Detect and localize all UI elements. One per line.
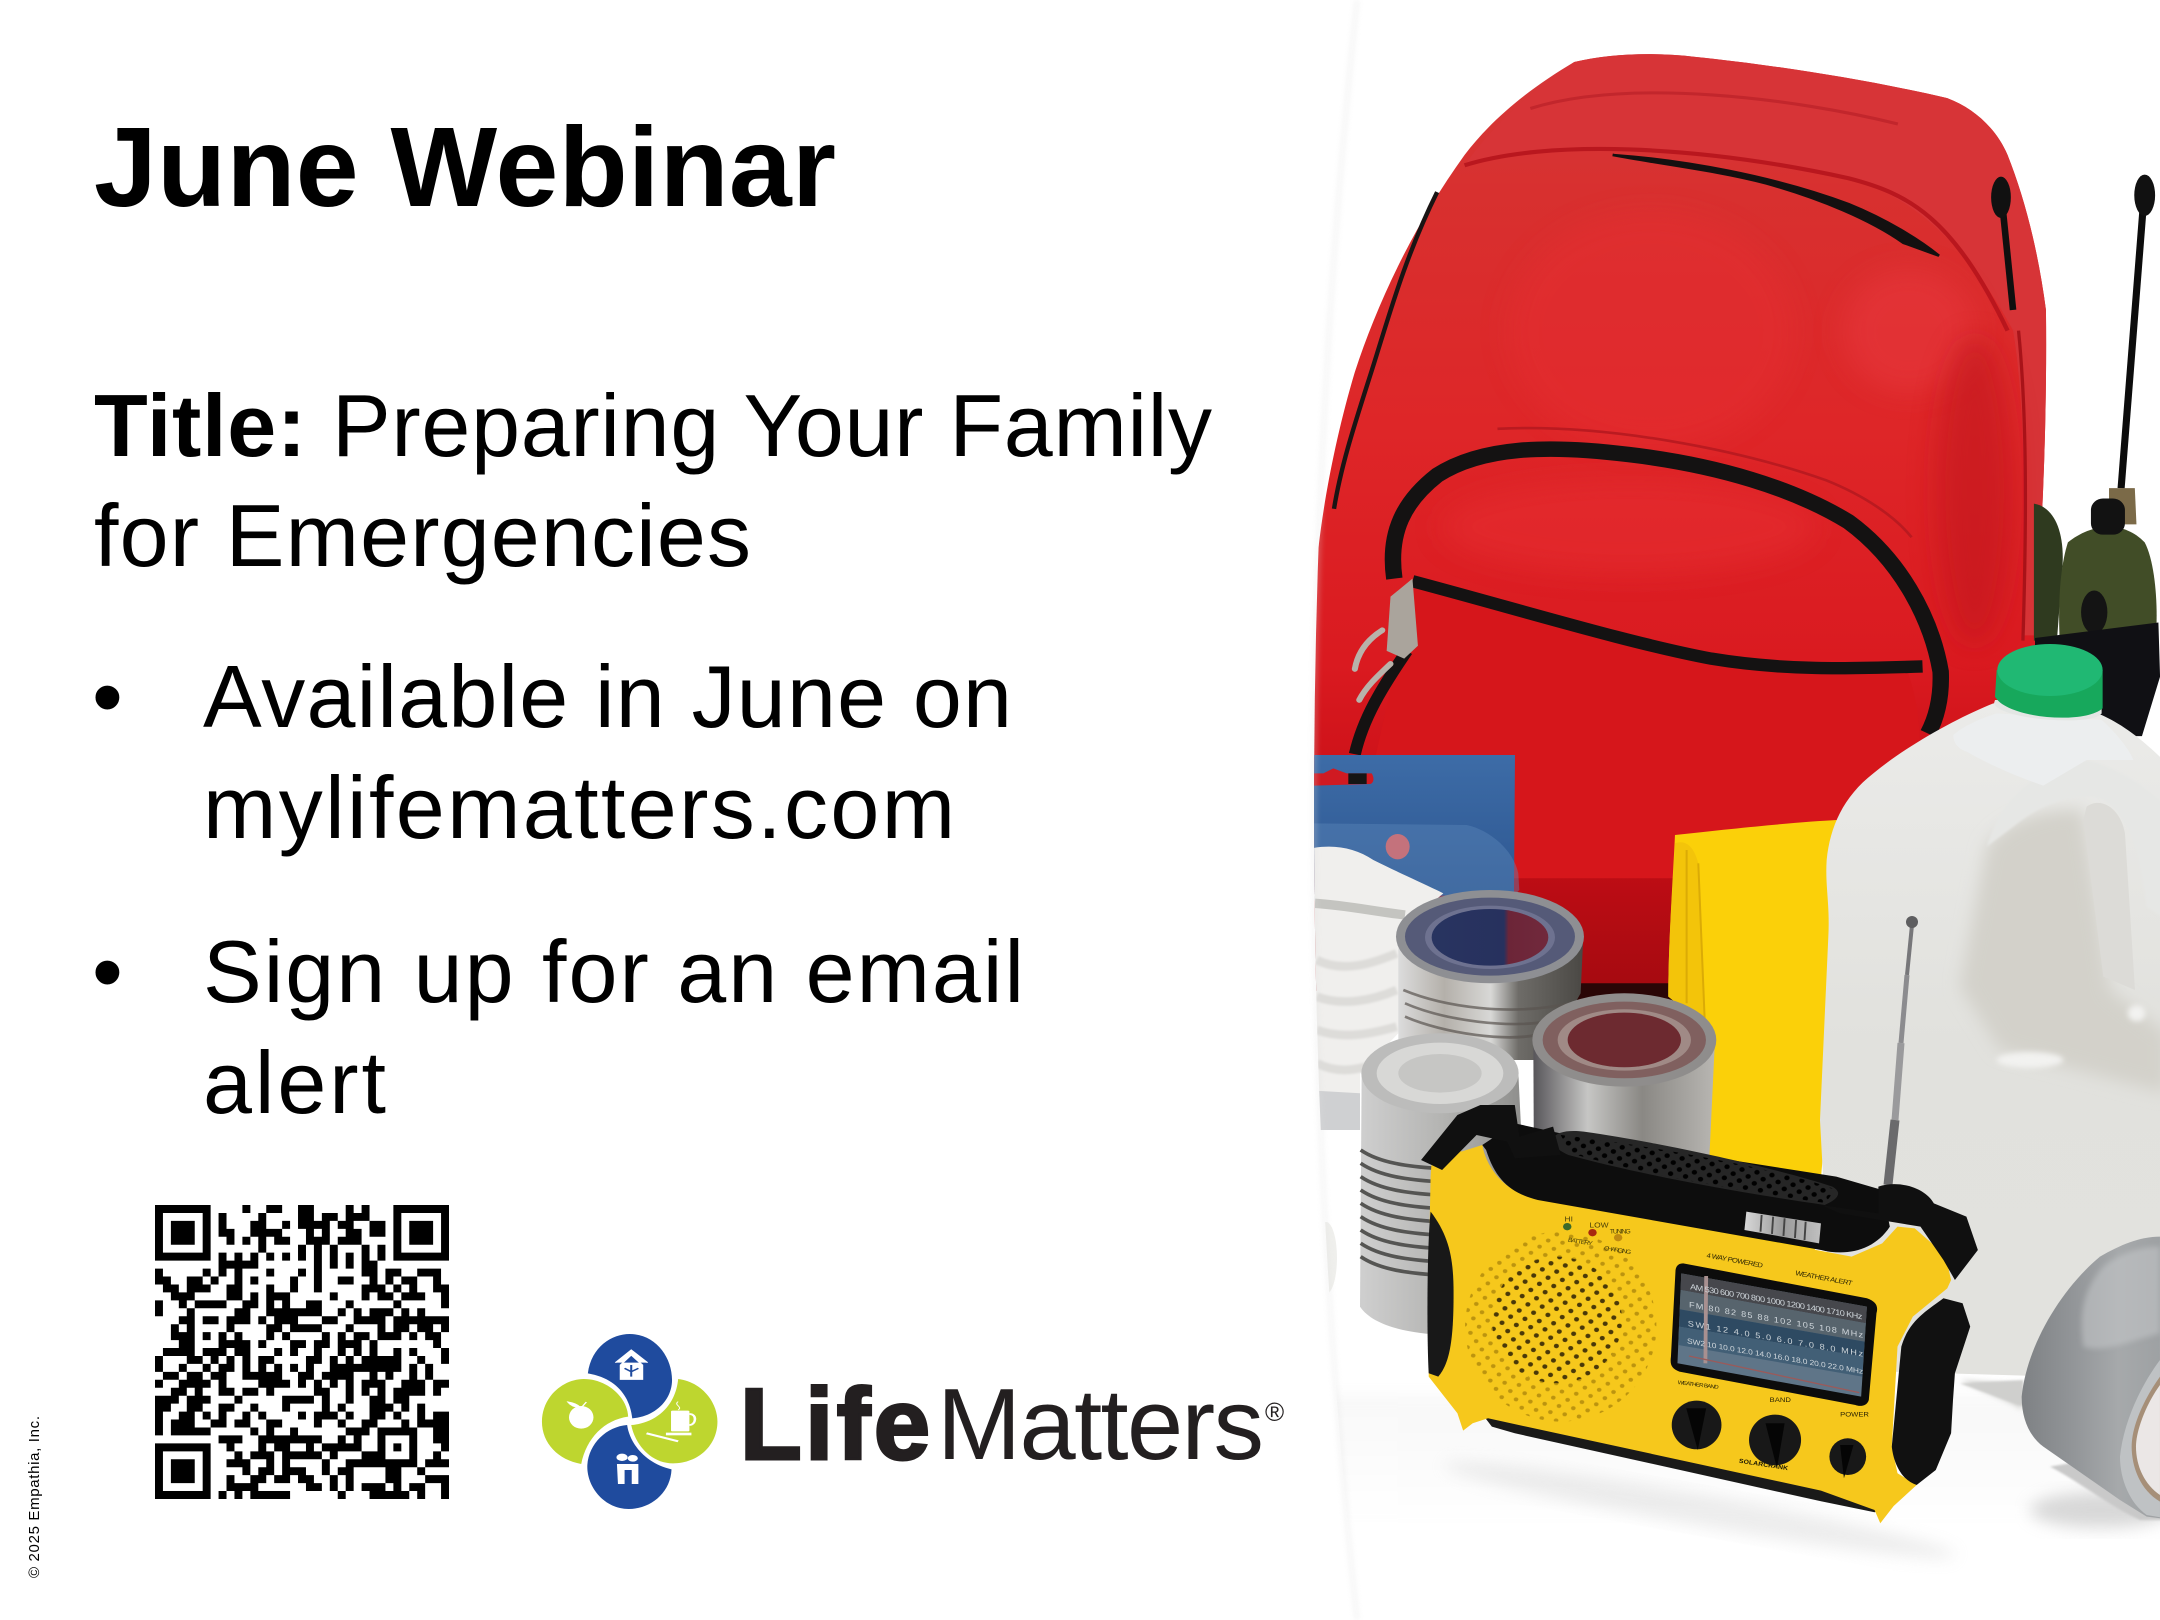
radio side grips bbox=[1427, 1212, 1454, 1377]
copyright: © 2025 Empathia, Inc. bbox=[26, 1416, 43, 1578]
front pocket zipper bbox=[1393, 449, 1941, 734]
tuning display: SW2 10 10.0 12.0 14.0 16.0 18.0 20.0 22.0 MHz bbox=[1687, 1337, 1863, 1376]
can: maroon lid bbox=[1532, 993, 1716, 1155]
LifeMatters logo bbox=[542, 1334, 1284, 1509]
bullet: availability: mylifematters.com bbox=[203, 758, 955, 857]
tuning display: AM 530 600 700 800 1000 1200 1400 1710 KHz bbox=[1690, 1282, 1862, 1321]
zipper pull bbox=[1387, 579, 1418, 659]
radio labels: POWER bbox=[1840, 1411, 1869, 1418]
radio labels: BAND bbox=[1770, 1396, 1791, 1404]
main top zipper bbox=[1613, 155, 1939, 256]
cans bbox=[1360, 890, 1716, 1335]
can: navy lid bbox=[1396, 890, 1584, 1060]
radio antenna bbox=[1888, 916, 1918, 1185]
QR code bbox=[155, 1205, 449, 1499]
can: silver bbox=[1360, 1033, 1523, 1335]
photo: emergency kit bbox=[1303, 54, 2160, 1571]
radio bbox=[1421, 1105, 1978, 1523]
logo wordmark: ® bbox=[1265, 1397, 1284, 1427]
radio labels: HI bbox=[1565, 1215, 1573, 1224]
blue mask package bbox=[1303, 755, 1519, 900]
dust mask bbox=[1303, 847, 1443, 1130]
text block: webinar title: Title: Preparing Your Family bbox=[94, 376, 1212, 475]
tuning display: FM 80 82 85 88 102 105 108 MHz bbox=[1689, 1300, 1863, 1339]
radio labels: SOLARCRANK bbox=[1738, 1458, 1789, 1472]
bullet: availability: • bbox=[92, 647, 123, 746]
bullet: email alert: alert bbox=[203, 1033, 386, 1132]
radio top band bbox=[1482, 1123, 1890, 1252]
knobs bbox=[1672, 1401, 1866, 1478]
floor tone bbox=[1310, 1395, 2160, 1525]
supplies: mask pack and blanket bbox=[1314, 755, 1836, 1250]
shadows bbox=[1315, 1222, 2160, 1571]
radio labels: WEATHER BAND bbox=[1677, 1380, 1719, 1391]
radio labels bbox=[1565, 1215, 1869, 1472]
bullet: email alert: • bbox=[92, 922, 123, 1021]
speaker grille bbox=[1465, 1232, 1656, 1422]
logo wordmark: Matters bbox=[937, 1369, 1264, 1481]
bullet: availability: Available in June on bbox=[203, 647, 1012, 746]
radio labels: WEATHER ALERT bbox=[1795, 1270, 1854, 1287]
radio tuner bbox=[1744, 1212, 1821, 1243]
side piping bbox=[1334, 192, 1437, 509]
radio labels: CHARGING bbox=[1603, 1245, 1632, 1256]
radio straps bbox=[1421, 1105, 1561, 1170]
logo wordmark: Life bbox=[740, 1369, 930, 1481]
logo wordmark bbox=[740, 1369, 1284, 1481]
radio labels: BATTERY bbox=[1567, 1237, 1594, 1247]
text block: webinar title: for Emergencies bbox=[94, 486, 751, 585]
radio labels: 4 WAY POWERED bbox=[1706, 1252, 1764, 1270]
logo mark bbox=[542, 1334, 717, 1509]
bullet: availability bbox=[92, 647, 1012, 857]
radio labels: TUNING bbox=[1610, 1229, 1631, 1235]
radio carry handle bbox=[1553, 1131, 1838, 1205]
tuning display: SW1 12 4.0 5.0 6.0 7.0 8.0 MHz bbox=[1688, 1319, 1863, 1358]
walkie talkies in mesh pocket bbox=[1991, 175, 2160, 736]
status lights bbox=[1563, 1223, 1571, 1230]
bullet: email alert: Sign up for an email bbox=[203, 922, 1024, 1021]
duct tape bbox=[1960, 1237, 2160, 1520]
radio labels: LOW bbox=[1589, 1221, 1609, 1230]
backpack bbox=[1311, 54, 2046, 991]
yellow blanket bbox=[1668, 820, 1836, 1250]
panel edge shadow bbox=[1314, 0, 1357, 1620]
water jug bbox=[1820, 644, 2160, 1380]
bullet: email alert bbox=[92, 922, 1024, 1132]
tuning display bbox=[1671, 1263, 1877, 1406]
text block: webinar title bbox=[94, 376, 1212, 585]
heading: June Webinar bbox=[94, 104, 836, 230]
